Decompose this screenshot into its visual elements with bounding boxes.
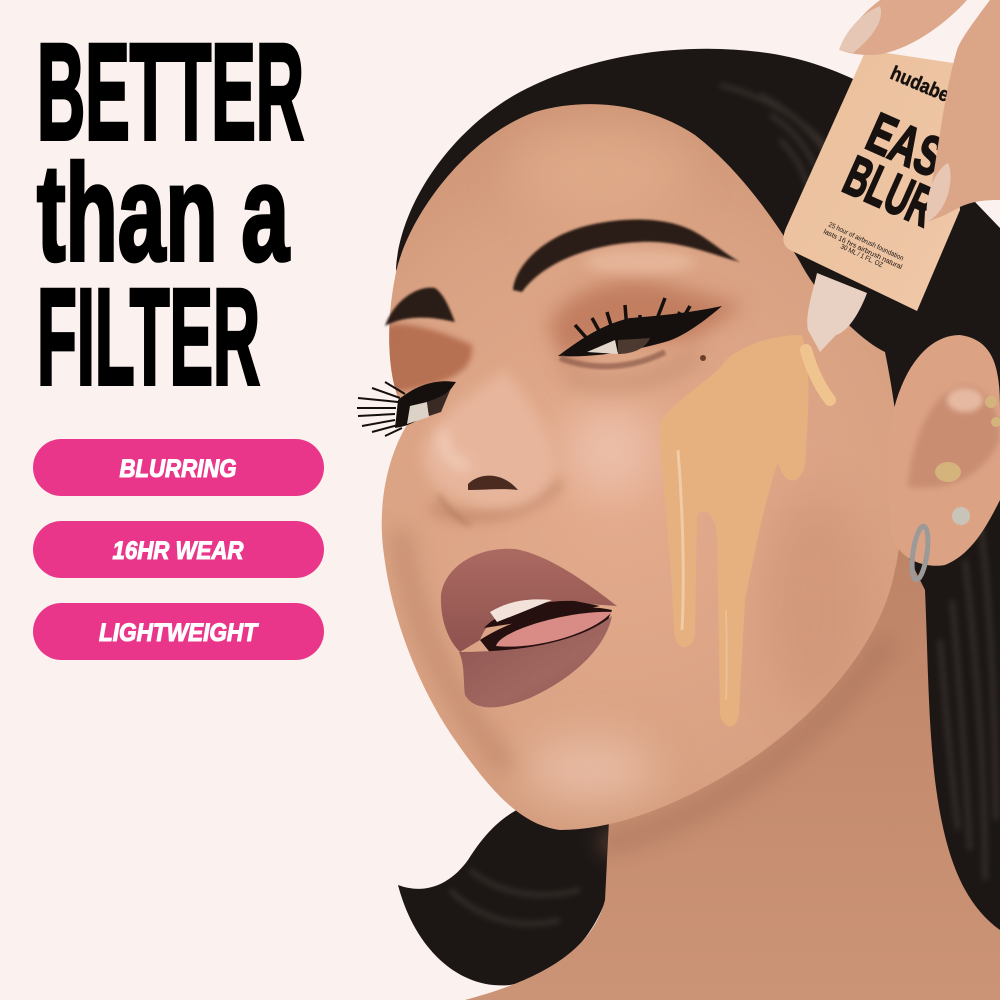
right eyebrow [513,220,740,292]
bottle nozzle [807,273,867,352]
bottle text: EAS [858,100,953,189]
hair [396,49,1000,985]
earrings [935,462,961,482]
bottle text: lasts 16 hrs airbrush natural [822,228,903,271]
right eye [558,298,722,366]
foundation drip [660,335,830,727]
face shading and highlights [380,125,870,802]
right finger [927,0,1000,222]
left eye [357,381,456,436]
product: bottle [783,0,1000,352]
title [37,16,304,414]
bottle text: 25 hour of airbrush foundation [827,221,905,263]
top finger [840,0,967,55]
right fingernail [927,163,950,222]
model portrait [357,49,1000,1000]
pill: blurring [33,439,324,496]
bottle text: 30 ML / 1 FL. OZ [839,243,884,270]
pill: 16hr wear: 16HR WEAR [112,537,244,565]
top fingernail [839,6,881,53]
pill: lightweight: LIGHTWEIGHT [99,619,259,647]
left eyebrow [385,288,455,326]
bottle text: BLUR [835,143,945,238]
face [382,104,902,830]
beauty mark [700,355,706,361]
neck shadow under jaw [600,640,890,845]
title: FILTER [37,261,260,414]
title: than a [37,137,290,290]
bottle text: hudabe [887,62,953,107]
bottle text [822,62,953,271]
bottle body [783,50,960,311]
nose [423,370,560,525]
infographic canvas: BETTER [37,16,304,169]
benefit pills [33,439,324,660]
pill: blurring: BLURRING [120,455,236,483]
pill: 16hr wear [33,521,324,578]
pill: lightweight [33,603,324,660]
neck [465,520,1000,1000]
lips [441,549,617,707]
ear [888,335,1000,581]
